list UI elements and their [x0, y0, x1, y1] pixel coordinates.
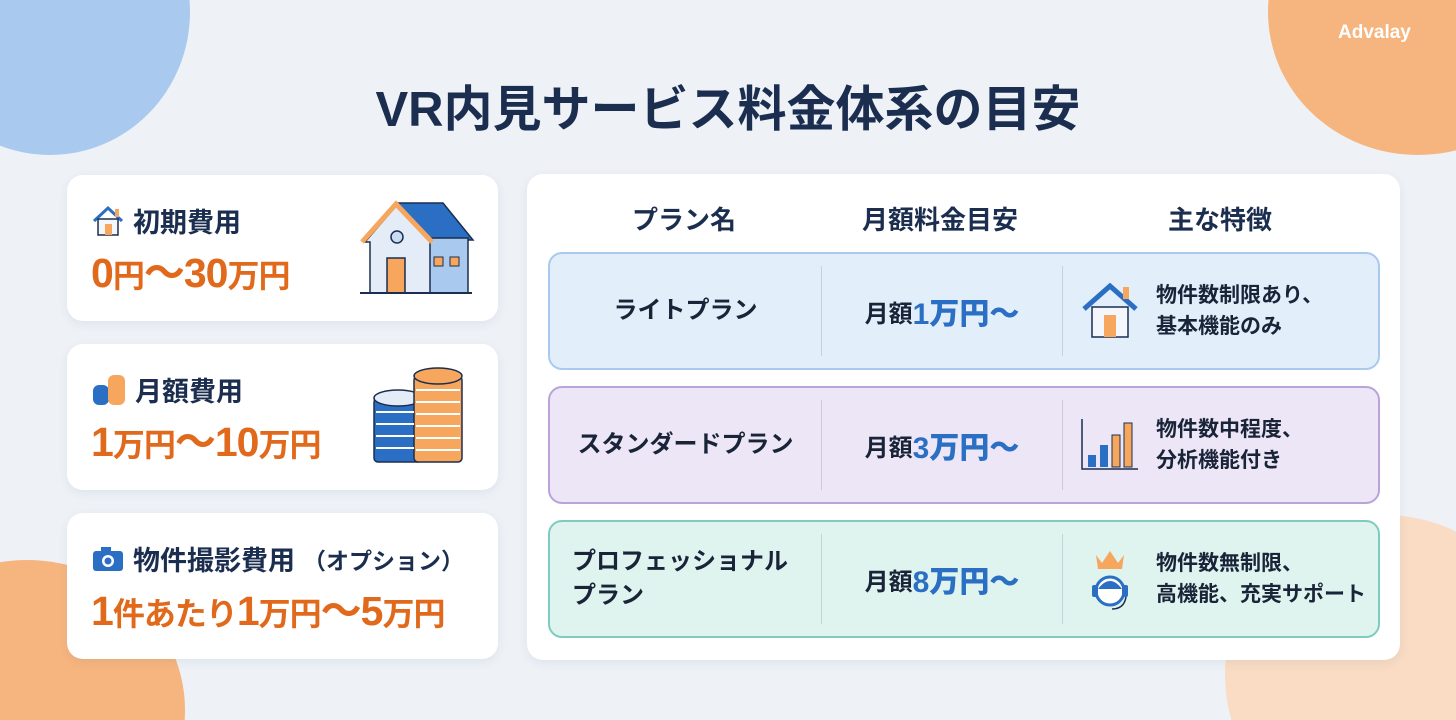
header: plan name: プラン名	[632, 205, 736, 235]
heading: photography option	[93, 546, 464, 576]
icon: coins	[373, 367, 463, 463]
row: light plan	[548, 252, 1380, 370]
row: standard plan: 3万円〜	[913, 432, 1019, 465]
heading: initial cost: 初期費用	[133, 208, 241, 238]
heading: monthly cost	[93, 375, 243, 407]
row: standard plan: 物件数中程度、	[1156, 418, 1303, 440]
header: monthly price: 月額料金目安	[862, 205, 1018, 235]
card: photography cost	[67, 513, 498, 659]
panel: plan table	[527, 174, 1400, 660]
row: standard plan: 分析機能付き	[1156, 449, 1282, 472]
value: 1万円〜10万円	[91, 419, 320, 465]
row: professional plan: プロフェッショナル	[572, 548, 788, 575]
card: monthly cost	[67, 344, 498, 490]
heading: photography option: 物件撮影費用	[133, 546, 295, 576]
row: standard plan: スタンダードプラン	[578, 431, 794, 458]
logo: Advalay	[1338, 22, 1411, 43]
row: standard plan: 月額	[865, 434, 913, 462]
card: initial cost	[67, 175, 498, 321]
row: light plan: 物件数制限あり、	[1156, 284, 1323, 306]
row: professional plan: 月額	[865, 568, 913, 596]
value: 1件あたり1万円〜5万円	[91, 588, 444, 634]
header: features: 主な特徴	[1168, 205, 1272, 235]
heading: initial cost	[93, 206, 241, 238]
row: light plan: ライトプラン	[614, 297, 758, 324]
heading: photography option: （オプション）	[303, 548, 464, 574]
row: light plan: 1万円〜	[913, 298, 1019, 331]
row: professional plan: 8万円〜	[913, 566, 1019, 599]
row: professional plan: プラン	[572, 582, 644, 609]
icon: house	[360, 200, 474, 294]
row: professional plan: 物件数無制限、	[1156, 552, 1303, 574]
row: professional plan: 高機能、充実サポート	[1156, 583, 1366, 606]
value: 0円〜30万円	[91, 250, 289, 296]
heading: monthly cost: 月額費用	[135, 377, 243, 407]
row: light plan: 月額	[865, 300, 913, 328]
row: standard plan	[548, 386, 1380, 504]
row: light plan: 基本機能のみ	[1156, 315, 1282, 338]
title: VR内見サービス料金体系の目安	[375, 83, 1081, 137]
row: professional plan	[548, 520, 1380, 638]
